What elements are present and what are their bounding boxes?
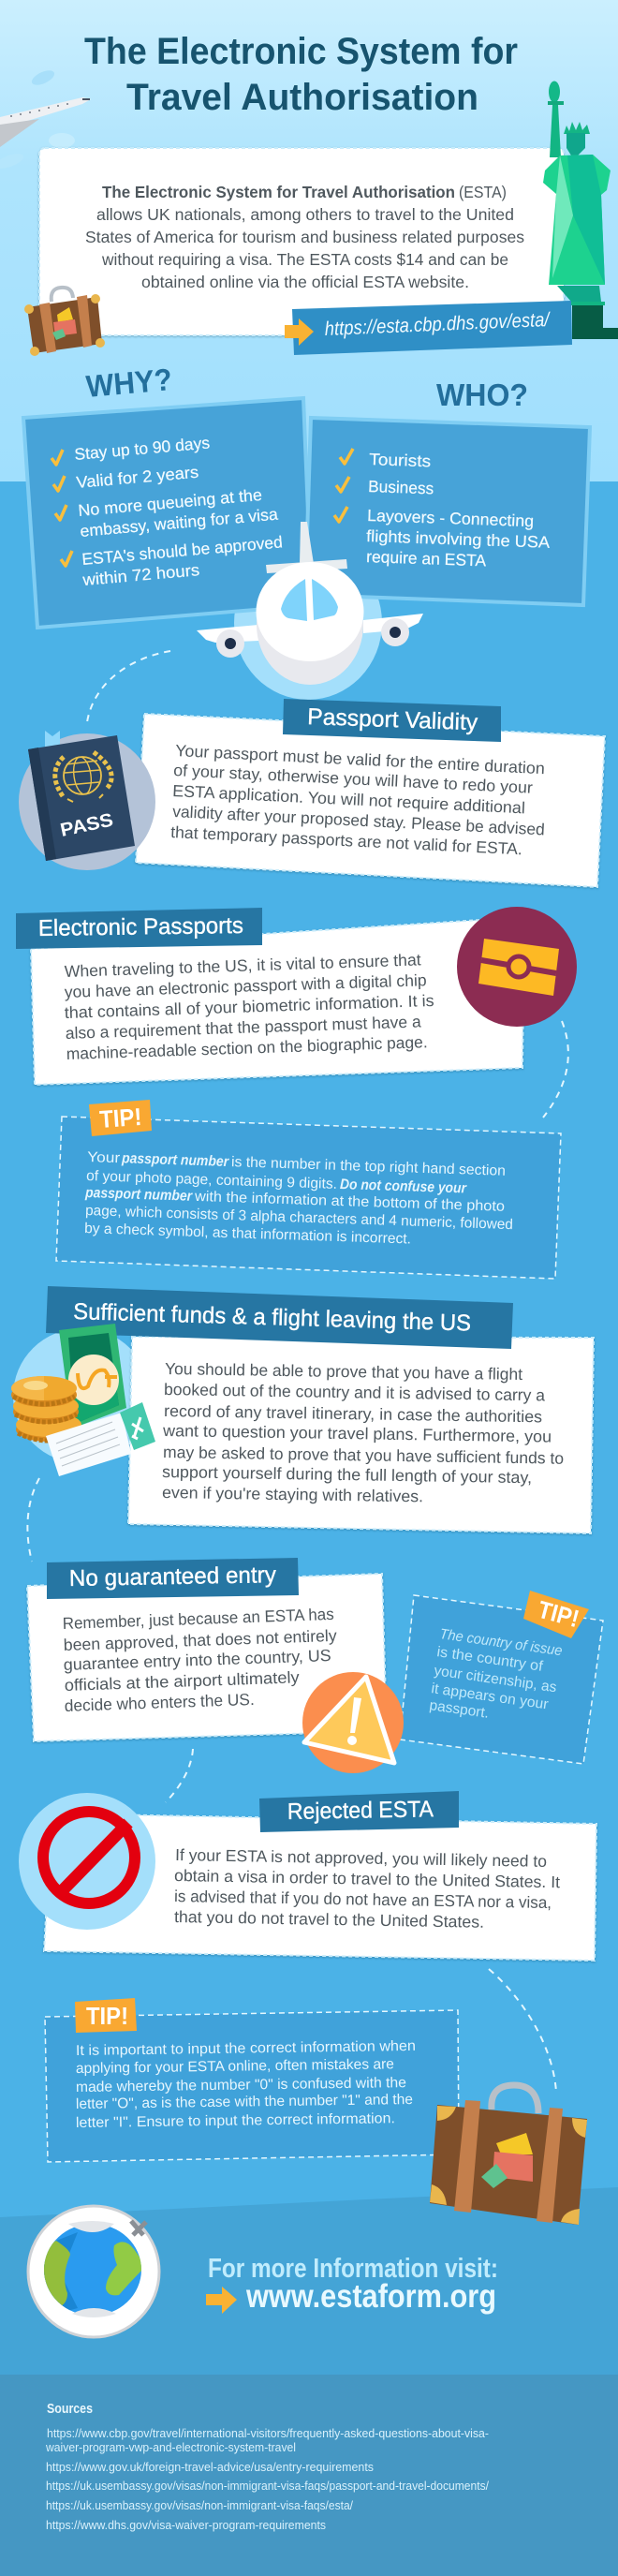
body text: Your passport must be valid for the entire duration bbox=[175, 741, 545, 777]
WHO text: Business bbox=[368, 477, 434, 497]
panel: country of issue tip bbox=[400, 1591, 603, 1764]
tip text: is the number in the top right hand section bbox=[231, 1154, 506, 1179]
body text: you have an electronic passport with a digital chip bbox=[64, 970, 427, 1001]
tip text bbox=[428, 1626, 564, 1722]
WHO text: Layovers - Connecting bbox=[367, 506, 534, 530]
tip text: page, which consists of 3 alpha characters and 4 numeric, followed bbox=[85, 1203, 513, 1233]
icon: globe bbox=[28, 2206, 159, 2337]
check marks bbox=[334, 449, 353, 522]
dashed route 1 bbox=[87, 651, 170, 722]
icon: clouds bbox=[0, 67, 75, 171]
icon: Statue of Liberty bbox=[543, 81, 618, 339]
check marks bbox=[52, 450, 72, 566]
panel: WHO list bbox=[305, 418, 590, 605]
icon: passport bbox=[19, 731, 155, 870]
body text: that contains all of your biometric information. It is bbox=[64, 991, 434, 1022]
heading bbox=[283, 699, 501, 742]
intro text: obtained online via the official ESTA website. bbox=[141, 273, 469, 291]
body text: also a requirement that the passport must have a bbox=[65, 1012, 421, 1043]
icon: airplane front view bbox=[197, 522, 423, 685]
body text: been approved, that does not entirely bbox=[63, 1626, 337, 1654]
dashed route 5 bbox=[489, 1969, 556, 2092]
body text: obtain a visa in order to travel to the United States. It bbox=[174, 1866, 560, 1891]
tip badge: TIP! bbox=[86, 2002, 128, 2030]
tip text bbox=[84, 1149, 513, 1248]
panel: Electronic Passports bbox=[16, 908, 524, 1085]
panel: No guaranteed entry bbox=[27, 1558, 387, 1741]
icon: money and ticket bbox=[11, 1324, 155, 1476]
ticket bbox=[46, 1402, 155, 1476]
body text: ESTA application. You will not require additional bbox=[172, 781, 525, 817]
WHO text: require an ESTA bbox=[366, 547, 487, 570]
tip text: by a check symbol, as that information is incorrect. bbox=[84, 1221, 411, 1248]
heading: No guaranteed entry bbox=[69, 1562, 277, 1591]
icon: warning bbox=[302, 1672, 404, 1773]
source links: https://www.gov.uk/foreign-travel-advice/usa/entry-requirements bbox=[46, 2461, 374, 2474]
tip text: letter "I". Ensure to input the correct information. bbox=[76, 2110, 395, 2131]
tip badge: TIP! bbox=[98, 1103, 142, 1133]
tip text: made whereby the number "0" is confused with the bbox=[76, 2075, 406, 2095]
body text: Remember, just because an ESTA has bbox=[62, 1605, 334, 1633]
tip badge bbox=[75, 1998, 137, 2033]
source links: https://www.cbp.gov/travel/international-visitors/frequently-asked-questions-about-visa- bbox=[47, 2427, 489, 2440]
body text: support yourself during the full length of your stay, bbox=[162, 1462, 532, 1487]
panel: Passport Validity bbox=[136, 699, 605, 887]
body text: is advised that if you do not have an ESTA nor a visa, bbox=[174, 1887, 552, 1912]
WHO text bbox=[366, 450, 551, 570]
source links bbox=[45, 2427, 489, 2532]
tip text: The country of issue bbox=[438, 1626, 564, 1659]
link text: https://esta.cbp.dhs.gov/esta/ bbox=[324, 309, 552, 340]
body text bbox=[62, 1605, 337, 1715]
icon: large suitcase bbox=[430, 2085, 587, 2225]
WHO text: Tourists bbox=[369, 450, 432, 470]
body text bbox=[64, 950, 434, 1063]
title bbox=[84, 31, 518, 118]
body text: officials at the airport ultimately bbox=[64, 1667, 300, 1695]
coin stack bbox=[11, 1376, 81, 1442]
plane halo bbox=[234, 546, 382, 700]
icon: prohibited sign bbox=[19, 1793, 155, 1930]
heading: Rejected ESTA bbox=[287, 1797, 434, 1825]
tip text: letter "O", as is the case with the number "1" and the bbox=[76, 2092, 413, 2112]
panel: Rejected ESTA bbox=[44, 1791, 596, 1961]
WHY text: embassy, waiting for a visa bbox=[80, 505, 279, 540]
WHY text: within 72 hours bbox=[81, 560, 200, 589]
tip text: with the information at the bottom of the photo bbox=[194, 1189, 505, 1215]
WHY text: No more queueing at the bbox=[78, 485, 263, 520]
tip badge bbox=[523, 1591, 589, 1638]
tip text: passport number bbox=[84, 1185, 193, 1205]
heading: Electronic Passports bbox=[38, 913, 243, 941]
body text bbox=[170, 741, 545, 858]
intro text: States of America for tourism and business related purposes bbox=[85, 228, 524, 246]
body text: even if you're staying with relatives. bbox=[162, 1483, 423, 1505]
intro text bbox=[85, 183, 524, 291]
tip badge bbox=[89, 1100, 152, 1136]
body text: may be asked to prove that you have sufficient funds to bbox=[163, 1443, 564, 1468]
tip text: of your photo page, containing 9 digits. bbox=[86, 1168, 337, 1192]
heading: Sufficient funds & a flight leaving the US bbox=[73, 1299, 471, 1337]
cta url: www.estaform.org bbox=[245, 2278, 496, 2315]
background: main blue bbox=[0, 481, 618, 2261]
tip text: it appears on your bbox=[430, 1680, 550, 1712]
icon: small suitcase bbox=[24, 288, 105, 356]
call to action bbox=[206, 2254, 498, 2315]
title: Travel Authorisation bbox=[126, 77, 478, 118]
gold emblem bbox=[55, 752, 111, 802]
heading bbox=[46, 1286, 513, 1349]
heading: WHO: WHO? bbox=[436, 378, 528, 412]
body text: want to question your travel plans. Furthermore, you bbox=[162, 1421, 552, 1446]
icon: chip bbox=[457, 907, 577, 1027]
tip text bbox=[76, 2038, 416, 2131]
body text bbox=[162, 1359, 564, 1505]
cta heading: For more Information visit: bbox=[208, 2254, 498, 2284]
background: sources band bbox=[0, 2375, 618, 2576]
panel: passport number tip bbox=[56, 1100, 561, 1279]
heading: WHY: WHY? bbox=[84, 362, 173, 404]
title: The Electronic System for bbox=[84, 31, 518, 72]
intro text: The Electronic System for Travel Authorisation bbox=[102, 183, 455, 201]
body text: decide who enters the US. bbox=[64, 1690, 255, 1715]
tip badge: TIP! bbox=[535, 1595, 582, 1633]
body text: machine-readable section on the biographic page. bbox=[66, 1032, 428, 1063]
tip text: It is important to input the correct information when bbox=[76, 2038, 416, 2059]
panel: WHY list bbox=[23, 398, 312, 628]
cta arrow bbox=[206, 2287, 237, 2314]
WHY text: ESTA's should be approved bbox=[81, 532, 284, 569]
body text: validity after your proposed stay. Please be advised bbox=[172, 802, 545, 838]
heading bbox=[259, 1791, 459, 1832]
passport label: PASS bbox=[58, 810, 115, 841]
background: lower darker band bbox=[0, 2187, 618, 2576]
WHY text bbox=[74, 433, 284, 589]
panel: introduction bbox=[39, 148, 564, 335]
WHY text: Valid for 2 years bbox=[76, 463, 199, 492]
heading bbox=[16, 908, 262, 949]
body text bbox=[174, 1845, 560, 1932]
body text: You should be able to prove that you have a flight bbox=[165, 1359, 522, 1384]
WHO text: flights involving the USA bbox=[366, 526, 551, 552]
body text: If your ESTA is not approved, you will likely need to bbox=[175, 1845, 547, 1871]
intro text: without requiring a visa. The ESTA costs $14 and can be bbox=[101, 250, 508, 269]
tip text: Your bbox=[87, 1149, 120, 1166]
source links: https://www.dhs.gov/visa-waiver-program-requirements bbox=[46, 2519, 326, 2532]
heading bbox=[47, 1558, 299, 1599]
panel: Sufficient funds bbox=[46, 1286, 594, 1533]
money icon backdrop bbox=[13, 1328, 150, 1463]
body text: that temporary passports are not valid for ESTA. bbox=[170, 822, 522, 858]
WHY text: Stay up to 90 days bbox=[74, 433, 211, 464]
tip text: passport. bbox=[428, 1697, 490, 1722]
tip text: Do not confuse your bbox=[340, 1177, 467, 1196]
body text: guarantee entry into the country, US bbox=[63, 1646, 331, 1674]
source links: https://uk.usembassy.gov/visas/non-immigrant-visa-faqs/passport-and-travel-documents/ bbox=[46, 2480, 489, 2493]
body text: of your stay, otherwise you will have to redo your bbox=[173, 761, 533, 797]
body text: record of any travel itinerary, in case the authorities bbox=[164, 1401, 542, 1426]
body text: When traveling to the US, it is vital to ensure that bbox=[64, 950, 421, 981]
sources bbox=[45, 2402, 489, 2532]
source links: https://uk.usembassy.gov/visas/non-immigrant-visa-faqs/esta/ bbox=[46, 2499, 354, 2512]
panel: correct information tip bbox=[45, 1998, 459, 2162]
dashed route 3 bbox=[27, 1478, 39, 1562]
link banner bbox=[285, 301, 572, 355]
icon: airplane top left bbox=[0, 97, 91, 147]
tip text: applying for your ESTA online, often mistakes are bbox=[76, 2056, 394, 2077]
body text: that you do not travel to the United States. bbox=[174, 1907, 484, 1932]
intro text: (ESTA) bbox=[459, 183, 507, 201]
dashed route 2 bbox=[543, 1021, 568, 1118]
body text: booked out of the country and it is advised to carry a bbox=[164, 1380, 545, 1404]
intro text: allows UK nationals, among others to travel to the United bbox=[96, 205, 514, 224]
source links: waiver-program-vwp-and-electronic-system-travel bbox=[45, 2441, 296, 2454]
background: sky bbox=[0, 0, 618, 481]
tip text: is the country of bbox=[435, 1644, 544, 1675]
heading: Passport Validity bbox=[307, 704, 478, 735]
dashed route 4 bbox=[166, 1749, 193, 1802]
sources heading: Sources bbox=[47, 2402, 93, 2417]
tip text: your citizenship, as bbox=[433, 1663, 558, 1695]
tip text: passport number bbox=[121, 1150, 229, 1170]
arrow bbox=[285, 318, 314, 346]
